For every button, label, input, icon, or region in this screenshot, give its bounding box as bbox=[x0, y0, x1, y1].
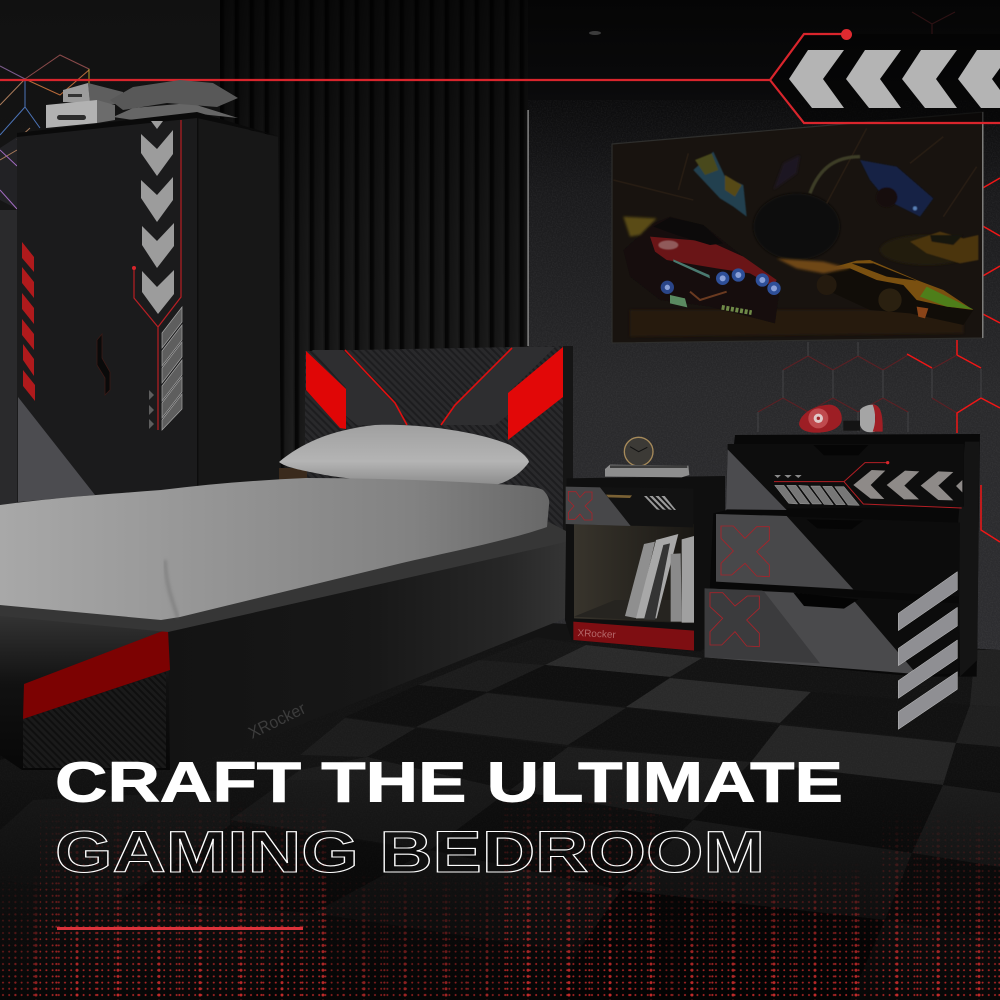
duvet fold shadow bbox=[165, 560, 178, 618]
circuit line bbox=[774, 463, 962, 508]
middle drawer bbox=[716, 514, 960, 597]
TV right edge highlight bbox=[982, 112, 984, 338]
bed frame rear side bbox=[168, 542, 566, 770]
headline line two: GAMING BEDROOM bbox=[55, 820, 765, 885]
storage boxes bbox=[46, 83, 123, 128]
chevron arrows bbox=[789, 50, 1000, 108]
faint hexagons above the TV bbox=[912, 12, 955, 34]
red X bbox=[710, 593, 759, 647]
floor base bbox=[0, 620, 1000, 1000]
drawer grey wedge bbox=[566, 487, 631, 526]
dresser body bbox=[707, 434, 980, 677]
black wing left bbox=[312, 350, 407, 425]
cabinet body bbox=[565, 476, 725, 652]
darker fold bbox=[705, 588, 820, 663]
carpet tiles bbox=[0, 637, 1000, 1000]
wooden bed back bbox=[279, 468, 307, 480]
bed bbox=[0, 346, 573, 770]
circuit dot bbox=[886, 461, 889, 464]
game scene bbox=[613, 128, 978, 337]
bright red hexagon edges bbox=[907, 178, 1000, 542]
red circuit line bbox=[0, 34, 1000, 123]
headphones bbox=[799, 405, 883, 433]
wardrobe bbox=[0, 112, 281, 505]
headboard side bbox=[563, 346, 573, 536]
red X bbox=[568, 492, 592, 520]
grey chevrons bbox=[141, 121, 174, 314]
handle notch bbox=[813, 445, 868, 455]
right side panel bbox=[958, 442, 979, 677]
base logo: XRocker bbox=[577, 628, 617, 641]
pillow bbox=[279, 425, 529, 486]
side wall grey bbox=[0, 210, 18, 505]
circuit dot bbox=[841, 29, 852, 40]
wardrobe front bbox=[17, 117, 197, 505]
black wing right bbox=[441, 347, 555, 425]
drawer front bbox=[566, 487, 693, 527]
dark chevron panel bbox=[770, 34, 1000, 123]
yellow green car bbox=[817, 260, 973, 325]
drawer handle bbox=[606, 495, 632, 498]
red foot band bbox=[23, 630, 170, 719]
clock bbox=[624, 437, 653, 466]
geometric neon wall art bbox=[0, 55, 89, 209]
chest of drawers bbox=[705, 405, 980, 729]
small triangles bbox=[149, 390, 154, 429]
drawer stripes bbox=[644, 496, 676, 510]
red accent line bbox=[57, 927, 303, 930]
flying blue car bbox=[693, 152, 747, 217]
carbon foot panel bbox=[23, 672, 166, 768]
headboard bbox=[305, 346, 573, 540]
wall texture bbox=[528, 100, 1000, 650]
hexagon wall lights bbox=[758, 178, 1000, 542]
duvet bbox=[0, 478, 549, 620]
hatched stripes bbox=[162, 307, 182, 430]
distant yellow car bbox=[910, 232, 978, 263]
top arrow graphic bbox=[0, 29, 1000, 123]
grey hexagon verticals bbox=[758, 342, 981, 432]
small triangles bbox=[774, 475, 802, 478]
headline bbox=[55, 750, 843, 885]
shelf bottom bbox=[574, 600, 694, 623]
books bbox=[625, 534, 694, 623]
left wall bbox=[0, 0, 225, 520]
grey wedge bbox=[705, 588, 917, 674]
red piping bbox=[345, 348, 512, 425]
grey corner wedge bbox=[18, 397, 95, 502]
red base panel bbox=[573, 622, 694, 651]
arena lines bbox=[613, 128, 977, 217]
open shelf bbox=[574, 524, 694, 623]
handle notch bbox=[807, 519, 863, 529]
stacked pillows bbox=[110, 80, 238, 120]
nightstand bbox=[565, 437, 725, 652]
top drawer bbox=[726, 444, 964, 510]
floor bbox=[0, 620, 1000, 1000]
XRocker logo on bed: XRocker bbox=[245, 699, 309, 743]
wardrobe side panel bbox=[197, 117, 281, 490]
red halftone dots bbox=[2, 802, 1000, 1000]
wall mounted TV bbox=[612, 112, 984, 343]
bottom drawer bbox=[705, 588, 959, 675]
slatted wall panels bbox=[220, 0, 528, 470]
purple distant car bbox=[773, 155, 800, 190]
red car bbox=[623, 217, 781, 323]
grey wedge bbox=[726, 449, 787, 510]
items on top of wardrobe bbox=[46, 80, 238, 128]
carpet grain bbox=[0, 640, 1000, 1000]
chevrons bbox=[853, 470, 962, 500]
wardrobe handle bbox=[97, 334, 110, 395]
red side stripes bbox=[22, 242, 35, 401]
sparks bbox=[777, 258, 850, 273]
corner edge bbox=[197, 118, 198, 488]
bed frame rim bbox=[0, 522, 566, 632]
white diagonal stripes bbox=[898, 572, 957, 729]
wall edge light strip bbox=[527, 110, 529, 346]
handle notch bbox=[793, 593, 858, 609]
red right panel bbox=[508, 347, 563, 440]
headline line one: CRAFT THE ULTIMATE bbox=[55, 750, 843, 814]
red circuit on wardrobe bbox=[134, 120, 181, 430]
circuit dot bbox=[132, 266, 136, 270]
screen bbox=[612, 112, 983, 343]
right textured wall bbox=[528, 0, 1000, 650]
dark blue car bbox=[810, 157, 933, 217]
book stack bbox=[605, 465, 689, 477]
wardrobe top edge bbox=[17, 112, 278, 137]
red X bbox=[721, 526, 769, 577]
stripes bbox=[775, 485, 859, 505]
grey wedge bbox=[716, 514, 853, 589]
dim red hexagon edges bbox=[758, 355, 957, 413]
foot end bbox=[0, 615, 170, 770]
ceiling light bbox=[589, 31, 601, 35]
ground glow bbox=[630, 310, 963, 337]
red left panel bbox=[306, 351, 346, 429]
floor shadow fade bbox=[0, 780, 1000, 1000]
